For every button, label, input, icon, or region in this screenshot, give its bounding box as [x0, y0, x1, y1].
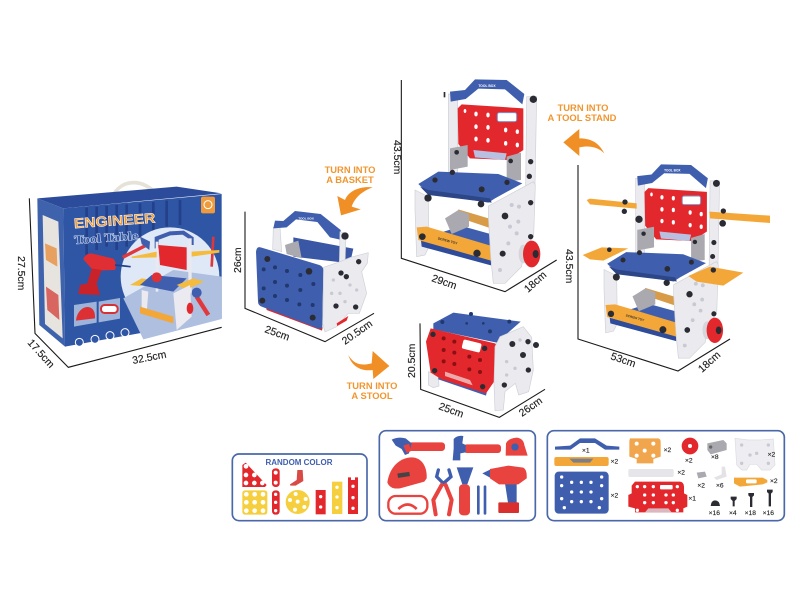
dimension labels: tool stand — [563, 249, 723, 375]
red pegboard face — [426, 328, 499, 393]
title: ENGINEER — [73, 210, 156, 231]
handle part — [555, 438, 619, 454]
bits — [478, 487, 485, 513]
helmet — [387, 457, 427, 489]
wrench — [197, 297, 208, 315]
dimension labels: tool chair: 43.5cm — [391, 140, 403, 175]
callout: turn into a stool — [347, 380, 397, 401]
medium screw part: ×18 — [745, 510, 756, 517]
inside block — [285, 241, 302, 258]
wheel — [519, 241, 540, 267]
dimension labels: basket: 25cm — [263, 324, 291, 344]
handle part: ×1 — [582, 447, 590, 454]
small cylinder part: ×2 — [697, 482, 705, 489]
chair body — [604, 164, 723, 358]
dimension labels: tool chair: 18cm — [522, 269, 549, 295]
dimension lines — [401, 80, 557, 292]
dimension labels: tool stand: 43.5cm — [563, 249, 575, 284]
board holes — [442, 336, 482, 374]
dimension labels: basket: 20.5cm — [340, 318, 375, 347]
dimension labels: box: 17.5cm — [25, 337, 57, 371]
panel: parts list — [547, 431, 784, 521]
tool stand with arms (right) — [578, 164, 770, 371]
grey block part — [707, 440, 727, 461]
red plate part — [628, 482, 696, 512]
board screws — [430, 332, 487, 389]
tool chair (center) — [401, 79, 557, 292]
white angle part — [714, 467, 727, 489]
board label — [497, 113, 517, 122]
short screw part — [729, 497, 737, 517]
right back post — [526, 97, 537, 187]
dimension lines — [420, 323, 545, 417]
panel heading: RANDOM COLOR — [266, 458, 333, 467]
wrench — [392, 438, 445, 455]
red bar — [348, 477, 358, 514]
backboard holes — [464, 109, 519, 147]
stool configuration — [420, 312, 545, 417]
toy drill — [482, 466, 527, 513]
short strip — [272, 468, 280, 487]
long screw part: ×16 — [763, 510, 774, 517]
right side panel — [488, 182, 535, 283]
dimension lines — [245, 212, 374, 342]
white side panel — [323, 253, 368, 332]
side screws — [333, 259, 361, 310]
product box with dimensions — [29, 183, 222, 367]
yellow square plate — [242, 490, 267, 515]
dimension labels: tool stand: 18cm — [696, 349, 723, 375]
goggles — [388, 496, 427, 514]
board label — [461, 339, 482, 353]
wheel part — [682, 438, 698, 464]
orange arms — [583, 199, 770, 286]
side panel holes — [498, 203, 521, 272]
blue seat top — [433, 313, 521, 343]
drill — [78, 253, 131, 295]
grey block part: ×8 — [711, 454, 719, 461]
callout: turn into a tool stand: TURN INTO — [558, 102, 608, 113]
back bar and floor — [458, 209, 494, 229]
panel: random color parts — [232, 454, 367, 521]
tool chair (center): TOOL BOX — [478, 84, 496, 88]
medium screw part — [745, 493, 756, 517]
dimension labels: tool chair — [391, 140, 549, 295]
orange front bar — [417, 227, 492, 261]
side panel holes — [330, 278, 358, 303]
seat — [418, 172, 522, 203]
chair body: SCREW TOY — [625, 313, 646, 322]
dimension labels: box — [15, 256, 168, 371]
dimension labels: stool: 25cm — [437, 401, 465, 421]
dimension labels: tool chair: 29cm — [430, 272, 458, 292]
title — [73, 210, 157, 247]
logo badge — [201, 197, 215, 213]
red base strip — [266, 307, 323, 331]
right post — [339, 232, 346, 265]
orange bracket part — [734, 478, 778, 487]
white side plate part: ×2 — [768, 452, 776, 459]
orange plate part: ×2 — [664, 447, 672, 454]
side strip artwork — [43, 215, 63, 338]
seat screws — [424, 170, 510, 207]
orange bar part: ×2 — [611, 459, 619, 466]
orange bar part — [554, 457, 619, 466]
helmet card — [74, 302, 97, 327]
small cylinder part — [697, 472, 707, 489]
chair on box — [130, 233, 219, 330]
left side leg — [415, 190, 429, 257]
dimension labels: stool: 20.5cm — [406, 343, 418, 378]
grey brackets — [450, 145, 468, 170]
basket configuration: TOOL BOX — [298, 216, 314, 220]
hammer — [453, 436, 501, 460]
handle — [450, 79, 524, 104]
left back post — [448, 94, 458, 177]
white angle part: ×6 — [716, 482, 724, 489]
dimension labels: basket — [232, 247, 375, 347]
callout: turn into a stool: TURN INTO — [347, 380, 397, 391]
callout: turn into a stool: A STOOL — [351, 390, 393, 401]
long screw part — [763, 490, 774, 517]
left leg — [428, 372, 439, 388]
nut part — [709, 500, 720, 517]
dimension labels: stool — [406, 343, 545, 421]
goggles card — [99, 298, 120, 322]
left post — [273, 227, 282, 252]
dimension labels: box: 27.5cm — [15, 256, 27, 291]
hammer — [123, 245, 147, 257]
carry handle — [273, 211, 342, 240]
far panel — [293, 237, 353, 263]
arrow: to tool stand — [563, 129, 604, 156]
red block — [316, 490, 326, 514]
long strip — [272, 490, 280, 515]
red backboard — [458, 104, 523, 160]
orange plate part — [629, 438, 672, 463]
callout: turn into a basket: A BASKET — [326, 174, 374, 185]
light background circle — [121, 227, 219, 326]
dimension labels: basket: 26cm — [232, 247, 244, 273]
pliers — [433, 470, 452, 514]
chair body: TOOL BOX — [664, 169, 681, 173]
orange bracket part: ×2 — [770, 478, 778, 485]
callout: turn into a tool stand — [548, 102, 617, 123]
white side plate part — [735, 438, 776, 470]
dimension labels: stool: 26cm — [517, 395, 545, 419]
curtain stripes — [87, 200, 180, 257]
dimension lines — [578, 165, 730, 371]
red plate part: ×1 — [688, 496, 696, 503]
white side panel — [494, 327, 533, 411]
dimension labels: box: 32.5cm — [131, 349, 168, 367]
angle bracket — [290, 470, 303, 486]
feature icons — [75, 329, 129, 346]
screwdriver — [212, 237, 213, 267]
callout: turn into a basket — [325, 164, 375, 185]
side screws — [502, 339, 539, 388]
seat holes — [440, 312, 511, 333]
box left side — [37, 198, 65, 347]
tool chair (center): SCREW TOY — [437, 236, 459, 246]
callout: turn into a tool stand: A TOOL STAND — [548, 112, 617, 123]
box front face — [63, 194, 222, 347]
blue under strip — [421, 241, 491, 265]
yellow bar — [332, 482, 342, 514]
dimension labels: tool stand: 53cm — [609, 350, 637, 370]
nut part: ×16 — [709, 510, 720, 517]
white strip part — [628, 469, 685, 477]
box handle — [112, 183, 157, 197]
short screw part: ×4 — [729, 510, 737, 517]
corner screws — [259, 256, 316, 321]
title: Tool Table — [74, 228, 140, 247]
putty knife — [457, 467, 473, 515]
side panel holes — [505, 338, 522, 377]
blue plate part: ×2 — [611, 492, 619, 499]
dimension lines — [29, 198, 222, 367]
callout: turn into a basket: TURN INTO — [325, 164, 375, 175]
side panel screws — [454, 150, 533, 257]
yellow disc — [286, 490, 310, 514]
arrow: to stool — [348, 351, 389, 379]
white strip part: ×2 — [677, 469, 685, 476]
peg holes — [262, 265, 315, 307]
panel: toy tools — [379, 431, 535, 521]
basket configuration — [245, 211, 374, 342]
blue pegboard face — [256, 247, 323, 329]
triangle plate — [242, 463, 267, 487]
wheel part: ×2 — [685, 457, 693, 464]
arrow: to basket — [337, 187, 373, 215]
box top flap — [37, 187, 222, 208]
tape measure — [506, 438, 528, 456]
blue plate part — [555, 472, 619, 514]
